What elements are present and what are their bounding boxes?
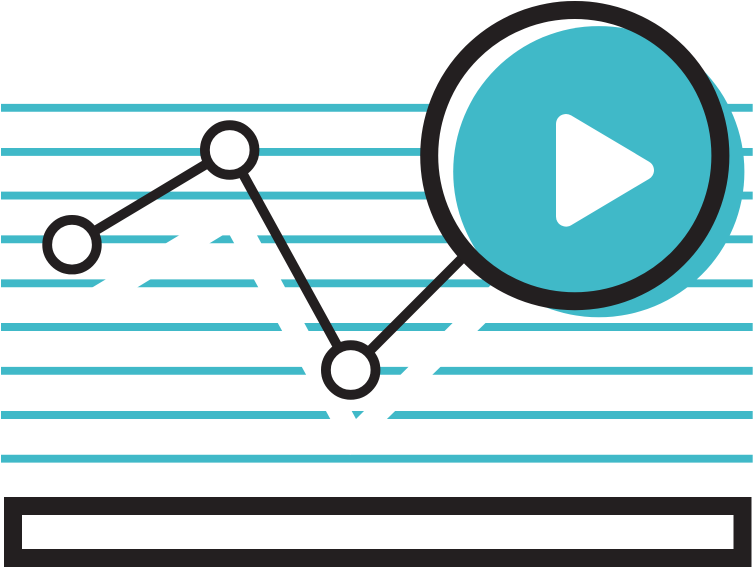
play button magnifier [425,6,744,317]
white lens backing [425,6,725,306]
dark ring [429,10,720,301]
white offset shadow of line chart [88,200,544,455]
bottom progress bar [13,506,742,558]
data point 2 [205,125,254,175]
data point 3 [326,345,376,395]
striped teal background lines [1,108,753,459]
line chart [47,125,590,395]
data point 1 [47,220,97,270]
teal disc [453,26,744,317]
icon: play triangle [566,124,644,217]
